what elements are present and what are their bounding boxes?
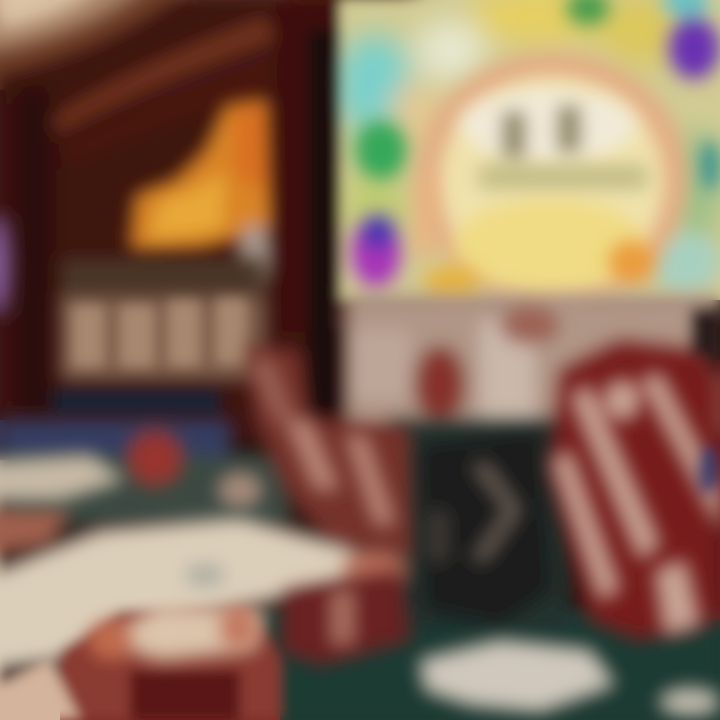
icon: red and white chip stack right — [550, 310, 720, 640]
panel: pale wall — [345, 294, 720, 433]
icon: red and white chip stack left — [245, 330, 412, 560]
icon: sunburst emblem — [413, 52, 688, 304]
emblem towers — [503, 106, 580, 158]
icon: black chip stack — [420, 430, 552, 625]
icon: top right panes — [566, 0, 720, 292]
panel: cards on table left — [0, 430, 407, 675]
panel: fire glow — [130, 98, 272, 287]
outer ring — [416, 52, 688, 304]
panel: green table middle — [390, 420, 570, 630]
panel: green table — [260, 610, 720, 720]
emblem band — [478, 164, 648, 190]
icon: red chips center — [280, 570, 410, 665]
ceiling stripes — [0, 0, 470, 165]
upper light — [460, 89, 636, 161]
icon: left column — [0, 90, 50, 415]
panel: blue table edge — [0, 420, 290, 525]
inner disc — [440, 76, 664, 288]
icon: purple pane — [350, 214, 402, 288]
orange rays — [413, 167, 656, 301]
panel: shelf with tan boxes — [50, 258, 265, 414]
panel: dark interior with ceiling — [0, 0, 470, 440]
icon: bottom left chips — [0, 605, 280, 720]
icon: green pane — [354, 120, 408, 180]
panel: stained glass backdrop — [337, 0, 720, 300]
icon: white cards bottom right — [420, 640, 720, 716]
lower glow — [455, 199, 645, 291]
icon: central column — [278, 0, 338, 410]
